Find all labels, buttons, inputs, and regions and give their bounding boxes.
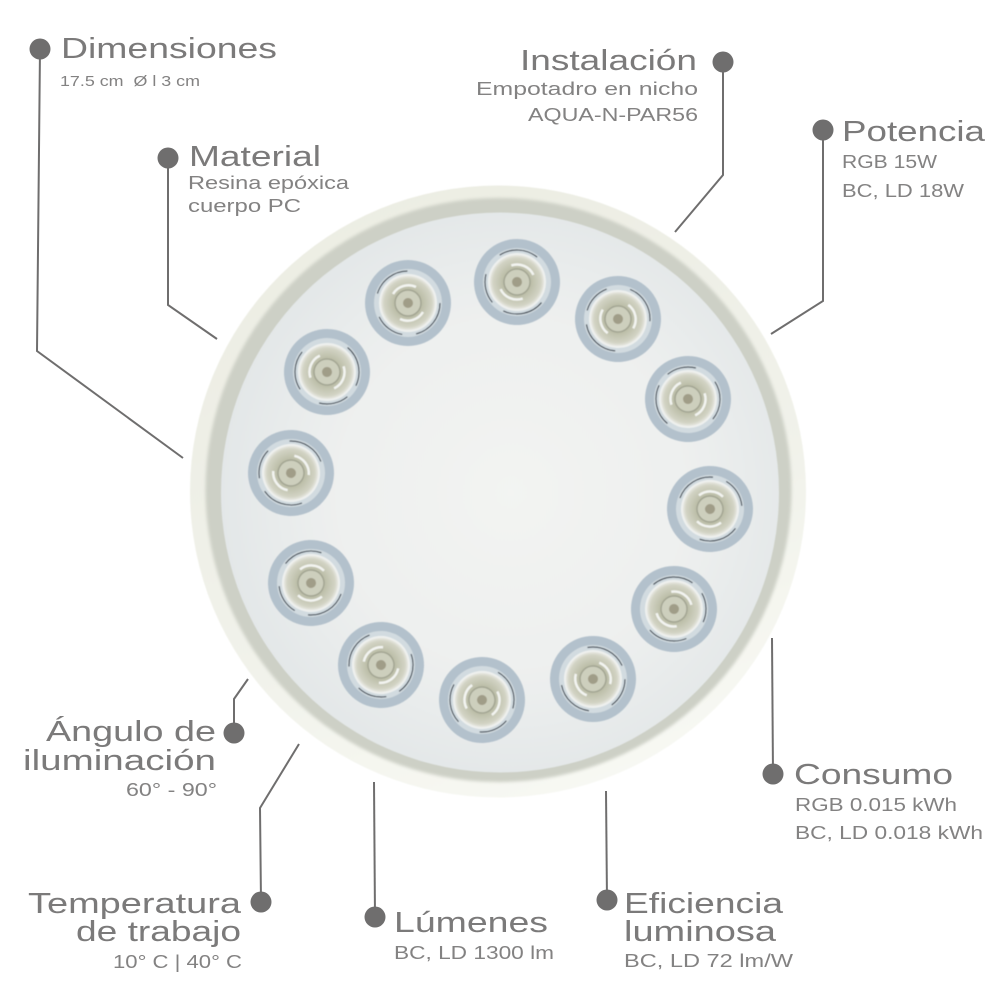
callout: Lúmenes xyxy=(364,782,554,963)
callout: Instalación: AQUA-N-PAR56 xyxy=(528,105,698,125)
callout: Consumo: Consumo xyxy=(794,759,953,791)
lamp photo xyxy=(190,186,806,798)
callout: Lúmenes: Lúmenes xyxy=(394,907,548,939)
lamp grey inner ring xyxy=(206,198,792,782)
callout: Instalación: Empotadro en nicho xyxy=(476,79,698,99)
callout: Ángulo de iluminación xyxy=(23,679,248,800)
callout: Consumo: RGB 0.015 kWh xyxy=(795,795,957,815)
callout: Material: Resina epóxica xyxy=(188,173,350,193)
callout: Material: Material xyxy=(189,141,321,173)
callout: Material xyxy=(158,141,350,339)
callout: Temperatura de trabajo xyxy=(28,744,299,972)
callout: Temperatura de trabajo: de trabajo xyxy=(76,916,241,948)
callout: Lúmenes: BC, LD 1300 lm xyxy=(394,943,554,963)
callout: Temperatura de trabajo: 10° C | 40° C xyxy=(113,952,242,972)
callout: Potencia: RGB 15W xyxy=(842,152,937,172)
callout: Dimensiones: 17.5 cm Ø l 3 cm xyxy=(60,73,200,90)
callout: Consumo: BC, LD 0.018 kWh xyxy=(795,823,983,843)
callout: Potencia: BC, LD 18W xyxy=(842,181,964,201)
callout: Material: cuerpo PC xyxy=(188,196,301,216)
callout: Ángulo de iluminación: Ángulo de xyxy=(46,715,216,748)
callout: Instalación: Instalación xyxy=(520,45,697,77)
lamp lens face xyxy=(221,212,779,772)
callout: Eficiencia luminosa: luminosa xyxy=(624,916,777,948)
callout: Ángulo de iluminación: iluminación xyxy=(23,745,216,777)
callout: Eficiencia luminosa xyxy=(596,791,793,971)
callout: Potencia xyxy=(771,116,986,334)
callout: Dimensiones: Dimensiones xyxy=(61,33,277,65)
callout: Potencia: Potencia xyxy=(842,116,986,148)
callout: Eficiencia luminosa: BC, LD 72 lm/W xyxy=(624,951,793,971)
callout: Dimensiones xyxy=(30,33,277,458)
LED ring xyxy=(236,221,765,759)
callout: Instalación xyxy=(476,45,734,232)
callout: Ángulo de iluminación: 60° - 90° xyxy=(126,780,217,800)
callout: Eficiencia luminosa: Eficiencia xyxy=(624,888,784,920)
callout: Consumo xyxy=(762,638,983,843)
callout: Temperatura de trabajo: Temperatura xyxy=(28,888,242,920)
lamp outer rim xyxy=(190,186,806,798)
